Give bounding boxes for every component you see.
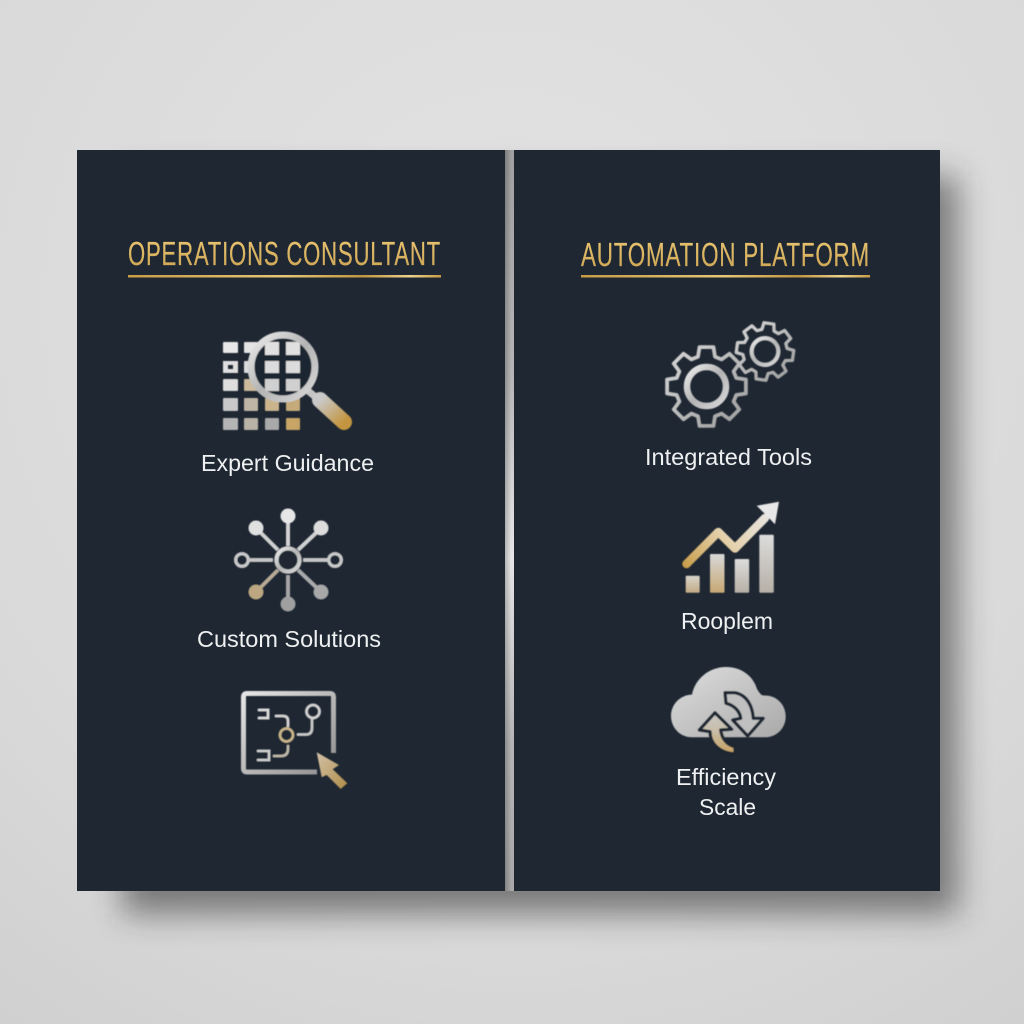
panel: automation platform <box>514 150 940 891</box>
icon: growth chart <box>686 502 779 593</box>
center divider <box>505 150 514 891</box>
label: rooplem: Rooplem <box>681 608 773 634</box>
heading underline <box>581 275 870 278</box>
label: efficiency scale <box>676 764 777 820</box>
label: efficiency scale: Scale <box>699 794 756 820</box>
icon: network hub <box>236 508 341 612</box>
label: custom solutions: Custom Solutions <box>197 626 381 652</box>
panel: operations consultant <box>77 150 505 891</box>
drop shadow <box>122 176 958 914</box>
icon: cloud with sync arrows <box>671 667 786 754</box>
label: integrated tools: Integrated Tools <box>645 444 812 470</box>
icon: workflow board with cursor <box>244 694 347 789</box>
heading underline <box>128 275 441 278</box>
label: expert guidance: Expert Guidance <box>201 450 374 476</box>
label: efficiency scale: Efficiency <box>676 764 777 790</box>
icon: data grid with magnifier <box>223 335 344 430</box>
heading: operations consultant: OPERATIONS CONSULTANT <box>128 236 441 273</box>
icon: gears <box>667 319 797 426</box>
heading: automation platform: AUTOMATION PLATFORM <box>581 237 870 274</box>
